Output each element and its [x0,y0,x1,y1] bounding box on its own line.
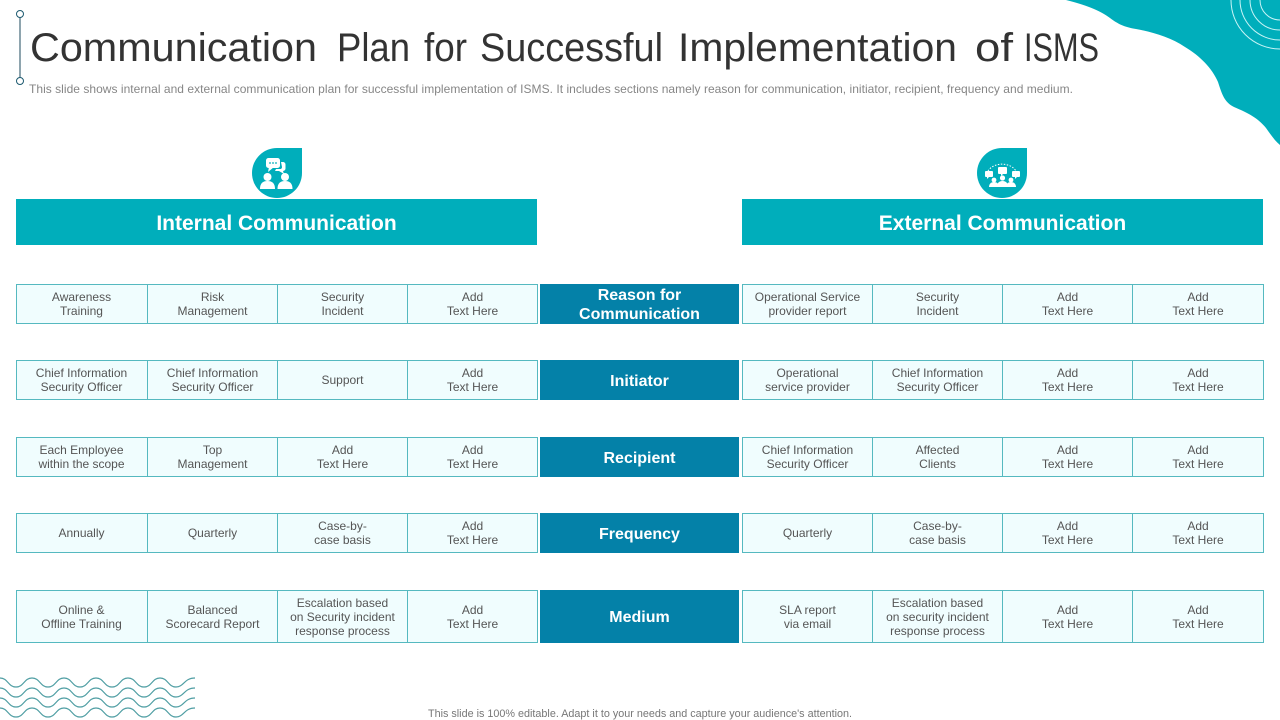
row: medium, external: Escalation based [892,596,983,610]
row: recipient, internal [16,437,538,477]
title: Implementation [678,26,957,70]
label: frequency [540,513,739,553]
row: reason, external: Add [1057,290,1078,304]
row: recipient, internal: Top [203,443,222,457]
row: frequency, external: Add [1057,519,1078,533]
row: frequency, external: Case-by- [913,519,962,533]
row: reason, internal: Management [177,304,248,318]
row: initiator, external: Text Here [1042,380,1093,394]
row: recipient, external: Affected [916,443,959,457]
row: medium, internal [16,590,538,643]
row: initiator, internal: Security Officer [41,380,122,394]
row: medium, external: Text Here [1042,616,1093,630]
row: initiator, external: Operational [776,366,839,380]
label: reason for communication: Communication [579,306,700,323]
heading: external communication: External Communication [879,212,1126,234]
row: reason, external [742,284,1264,324]
heading: internal communication [16,199,537,245]
title: Communication [30,26,317,70]
row: initiator, internal: Chief Information [36,366,127,380]
row: recipient, external: Text Here [1042,457,1093,471]
row: initiator, external: Add [1187,366,1209,380]
row: initiator, internal: Add [462,366,483,380]
row: recipient, external: Security Officer [767,457,848,471]
label: frequency: Frequency [599,526,680,542]
row: reason, external: Add [1187,290,1209,304]
row: initiator, internal [16,360,538,400]
row: frequency, external [742,513,1264,553]
row: medium, external [742,590,1264,643]
icon: internal communication [252,148,302,198]
row: medium, internal: Add [462,602,483,616]
label: initiator: Initiator [610,372,669,390]
title: for [424,26,467,70]
row: medium, internal: response process [295,624,390,638]
row: recipient, external: Clients [919,457,956,471]
row: initiator, external: service provider [765,380,850,394]
row: initiator, internal: Security Officer [172,380,253,394]
row: medium, external: SLA report [779,602,836,616]
row: medium, internal: Balanced [187,602,238,616]
heading: internal communication: Internal Communication [156,212,397,234]
row: medium, internal: Escalation based [297,596,388,610]
row: frequency, internal [16,513,538,553]
row: frequency, external: Text Here [1172,533,1224,547]
row: recipient, internal: Management [177,457,248,471]
label: recipient [540,437,739,477]
row: initiator, external: Security Officer [897,380,978,394]
row: initiator, external [742,360,1264,400]
icon: external communication [977,148,1027,198]
row: frequency, internal: Add [462,519,483,533]
row: recipient, external: Add [1187,443,1209,457]
corner blob with rings [1066,0,1280,145]
row: recipient, external [742,437,1264,477]
row: reason, external: Text Here [1172,304,1224,318]
title [30,26,1099,70]
row: initiator, external: Text Here [1172,380,1224,394]
row: initiator, internal: Text Here [447,380,498,394]
row: initiator, internal: Chief Information [167,366,258,380]
row: frequency, internal: Case-by- [318,519,367,533]
row: medium, external: Add [1057,602,1078,616]
row: recipient, internal: Text Here [317,457,368,471]
row: medium, external: Text Here [1172,616,1224,630]
label: reason for communication [540,284,739,324]
title: ISMS [1024,26,1099,70]
heading: external communication [742,199,1263,245]
row: initiator, internal: Support [321,373,364,387]
row: frequency, internal: Quarterly [188,526,237,540]
row: recipient, external: Chief Information [762,443,853,457]
row: medium, internal: Scorecard Report [165,616,260,630]
row: frequency, external: Text Here [1042,533,1093,547]
row: frequency, external: case basis [909,533,966,547]
row: reason, internal: Awareness [52,290,111,304]
row: medium, internal: Online & [58,602,105,616]
row: recipient, external: Add [1057,443,1078,457]
decorative waves [0,677,195,718]
row: recipient, internal: Each Employee [39,443,124,457]
row: medium, internal: Text Here [447,616,498,630]
title: Successful [480,26,663,70]
subtitle: This slide shows internal and external communication plan for successful implementation of ISMS. It includes sections namely reason for communication, initiator, recipient, frequency and medium. [29,82,1073,96]
row: reason, internal: Risk [201,290,224,304]
row: frequency, internal: Text Here [447,533,498,547]
row: reason, internal [16,284,538,324]
row: reason, external: provider report [768,304,847,318]
row: reason, internal: Text Here [447,304,498,318]
label: medium [540,590,739,643]
row: initiator, external: Chief Information [892,366,983,380]
row: reason, internal: Training [60,304,103,318]
title: of [975,26,1014,70]
title: Plan [337,26,410,70]
row: recipient, internal: Add [332,443,353,457]
row: medium, external: via email [784,616,831,630]
row: reason, internal: Security [321,290,364,304]
row: reason, external: Incident [916,304,958,318]
label: reason for communication: Reason for [598,287,681,304]
title accent line [16,10,24,85]
row: frequency, internal: case basis [314,533,371,547]
row: medium, external: response process [890,624,985,638]
row: recipient, internal: within the scope [38,457,125,471]
row: recipient, external: Text Here [1172,457,1224,471]
label: initiator [540,360,739,400]
row: medium, internal: Offline Training [41,616,122,630]
row: recipient, internal: Text Here [447,457,498,471]
row: reason, external: Text Here [1042,304,1093,318]
row: reason, external: Operational Service [755,290,860,304]
label: medium: Medium [609,609,670,626]
row: initiator, external: Add [1057,366,1078,380]
row: recipient, internal: Add [462,443,483,457]
footer note: This slide is 100% editable. Adapt it to your needs and capture your audience's attention. [428,708,852,720]
row: frequency, external: Quarterly [783,526,832,540]
row: reason, internal: Incident [321,304,364,318]
row: reason, internal: Add [462,290,483,304]
row: reason, external: Security [916,290,959,304]
row: medium, internal: on Security incident [290,610,395,624]
row: frequency, internal: Annually [58,526,105,540]
row: medium, external: Add [1187,602,1209,616]
row: frequency, external: Add [1187,519,1209,533]
label: recipient: Recipient [603,450,676,466]
row: medium, external: on security incident [886,610,989,624]
